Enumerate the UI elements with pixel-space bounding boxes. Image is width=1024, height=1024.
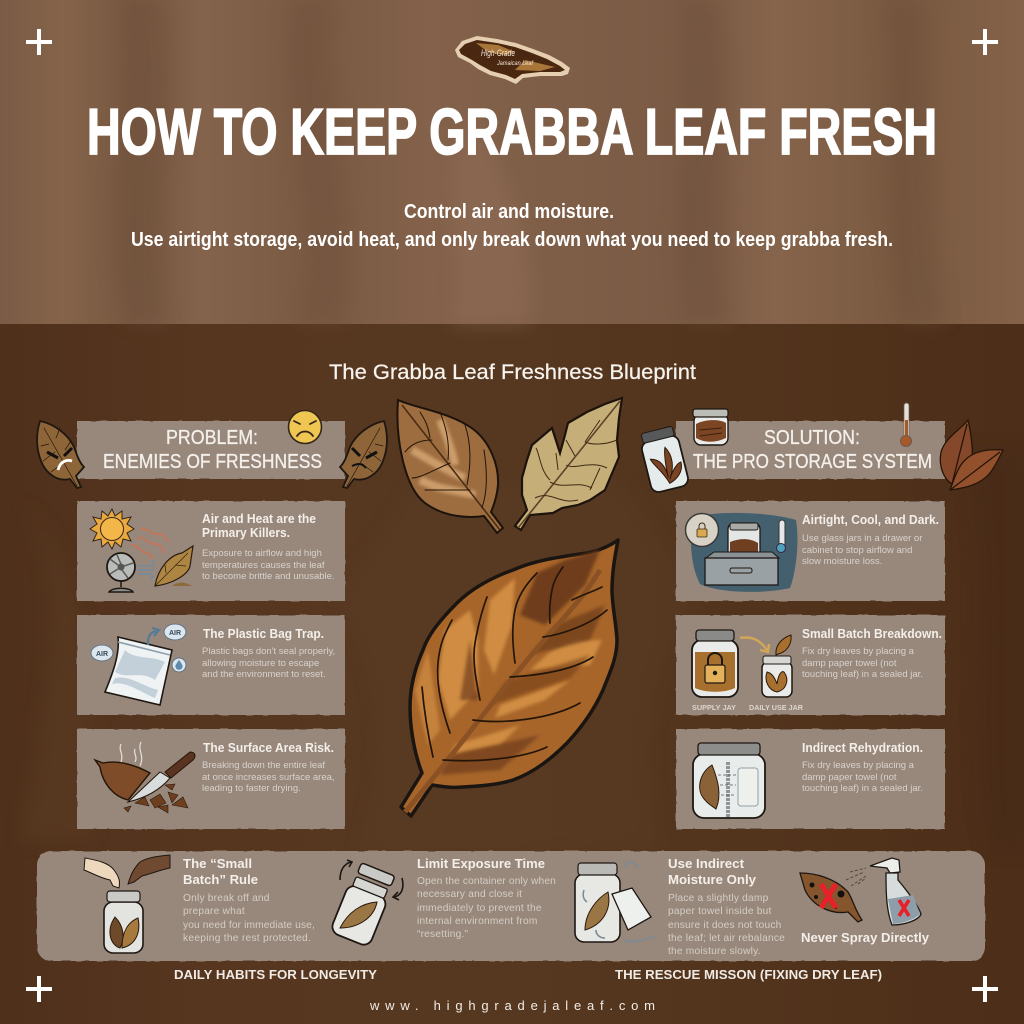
caption: daily habits: DAILY HABITS FOR LONGEVITY xyxy=(174,967,377,982)
text: small batch: Fix dry leaves by placing a xyxy=(802,646,915,657)
text: limit exposure: “resetting.” xyxy=(417,929,468,940)
icon: escape arrow xyxy=(148,628,159,645)
icon: cold thermometer xyxy=(776,520,786,552)
icon: spray bottle xyxy=(870,858,921,925)
icon: rehydration jar xyxy=(693,743,765,818)
text: small batch rule: keeping the rest protected. xyxy=(183,933,311,944)
jar labels: SUPPLY JAY xyxy=(692,703,736,712)
problem heading text: ENEMIES OF FRESHNESS xyxy=(103,451,322,473)
icon: knife xyxy=(128,752,195,802)
icon: air cloud right: AIR xyxy=(169,630,181,637)
text: limit exposure: Open the container only when xyxy=(417,876,556,887)
text: small batch rule: Only break off and xyxy=(183,893,270,904)
icon: sad face xyxy=(288,410,322,444)
subtitle: Control air and moisture. xyxy=(404,201,614,223)
icon: fan xyxy=(107,553,135,592)
text: never spray directly: Never Spray Directly xyxy=(801,930,930,945)
big leaf midrib xyxy=(405,570,600,812)
icon: spray mist xyxy=(846,868,866,886)
text: air and heat: Air and Heat are the xyxy=(202,511,316,526)
text: small batch rule: The “Small xyxy=(183,856,252,871)
icon: cut leaf xyxy=(95,760,150,800)
icon: angry leaf right xyxy=(340,421,387,488)
logo: High-Grade Jamaican Leaf: Jamaican Leaf xyxy=(496,61,534,67)
text: airtight cool dark: Use glass jars in a drawer or xyxy=(802,533,922,544)
text: indirect moisture: ensure it does not touch xyxy=(668,920,782,931)
icon: opening jar xyxy=(330,860,403,947)
text: indirect moisture xyxy=(668,856,785,957)
text: small batch rule: you need for immediate use, xyxy=(183,920,315,931)
text: indirect rehydration: Indirect Rehydration. xyxy=(802,740,923,755)
jar labels xyxy=(692,703,803,712)
text: indirect moisture: Use Indirect xyxy=(668,856,745,871)
panel: surface area xyxy=(95,740,335,813)
text: air and heat xyxy=(202,511,335,582)
icon: heat waves xyxy=(131,529,169,559)
icon: two brown leaves xyxy=(940,420,1003,490)
solution heading text: SOLUTION: xyxy=(764,427,860,449)
icon: air cloud left xyxy=(91,645,113,661)
icon: air cloud right xyxy=(164,624,186,640)
text: indirect rehydration: damp paper towel (not xyxy=(802,772,897,783)
heading: blueprint: The Grabba Leaf Freshness Blueprint xyxy=(329,361,696,384)
logo: High-Grade Jamaican Leaf: High-Grade xyxy=(481,48,515,58)
icon: jar with towel xyxy=(575,862,655,942)
icon: top right dry leaf xyxy=(515,398,622,530)
text: indirect moisture: Place a slightly damp xyxy=(668,893,769,904)
icon: supply jar with lock xyxy=(692,630,738,697)
panel: plastic bag xyxy=(91,624,335,705)
solution heading text: THE PRO STORAGE SYSTEM xyxy=(693,451,932,473)
text: air and heat: temperatures causes the leaf xyxy=(202,560,325,571)
icon: airtight badge xyxy=(686,514,718,546)
text: small batch: damp paper towel (not xyxy=(802,658,897,669)
big leaf highlights xyxy=(415,578,602,755)
problem heading text: PROBLEM: xyxy=(166,427,258,449)
icon: leaf crumbs xyxy=(124,784,188,813)
text: limit exposure: internal environment from xyxy=(417,916,538,927)
text: indirect moisture: the moisture slowly. xyxy=(668,946,761,957)
icon: angry leaf left xyxy=(37,421,84,488)
icon: jar with leaves xyxy=(104,891,143,953)
text: surface area xyxy=(202,740,335,794)
text: small batch: touching leaf) in a sealed jar. xyxy=(802,669,923,680)
text: small batch xyxy=(802,626,942,680)
text: surface area: The Surface Area Risk. xyxy=(203,740,334,755)
icon: tilted jar with leaves xyxy=(638,425,690,494)
panel backgrounds xyxy=(37,421,985,961)
text: plastic bag: allowing moisture to escape xyxy=(202,658,319,669)
icon: moisture drop xyxy=(172,658,186,672)
text: plastic bag: The Plastic Bag Trap. xyxy=(203,626,324,641)
text: limit exposure: Limit Exposure Time xyxy=(417,856,545,871)
footer: website: www. highgradejaleaf.com xyxy=(369,998,655,1013)
panel: indirect rehydration xyxy=(693,740,923,818)
icon: daily use jar xyxy=(762,635,792,697)
background: upper banner xyxy=(0,0,1024,324)
text: limit exposure xyxy=(417,856,556,940)
text: plastic bag: Plastic bags don't seal properly, xyxy=(202,646,335,657)
icon: small jar with leaves xyxy=(693,409,728,445)
subtitle: Use airtight storage, avoid heat, and only break down what you need to keep grabba fresh. xyxy=(131,229,893,251)
panel: air and heat xyxy=(90,509,335,592)
icon: large central leaf xyxy=(401,540,618,816)
text: airtight cool dark: Airtight, Cool, and Dark. xyxy=(802,512,939,527)
icon: thermometer xyxy=(900,403,912,446)
text: small batch: Small Batch Breakdown. xyxy=(802,626,942,641)
text: airtight cool dark: slow moisture loss. xyxy=(802,556,882,567)
panel: problem header xyxy=(37,410,387,488)
text: plastic bag: and the environment to reset. xyxy=(202,669,326,680)
text: air and heat: to become brittle and unusable. xyxy=(202,571,335,582)
text: indirect rehydration: Fix dry leaves by placing a xyxy=(802,760,915,771)
panel: small batch breakdown xyxy=(692,626,942,712)
icon: plastic bag xyxy=(105,637,172,705)
icon: top left leaf xyxy=(397,400,503,533)
panel: airtight cool dark xyxy=(686,512,939,592)
icon: hands over jar xyxy=(84,855,170,888)
text: surface area: at once increases surface area, xyxy=(202,772,335,783)
jar labels: DAILY USE JAR xyxy=(749,703,803,712)
icon: air cloud left: AIR xyxy=(96,651,108,658)
text: indirect rehydration: touching leaf) in a sealed jar. xyxy=(802,783,923,794)
text: limit exposure: immediately to prevent the xyxy=(417,903,542,914)
text: plastic bag xyxy=(202,626,335,680)
icon: spotted leaf with red x xyxy=(800,873,862,922)
text: indirect moisture: the leaf; let air rebalance xyxy=(668,933,785,944)
text: small batch rule: prepare what xyxy=(183,906,245,917)
text: small batch rule xyxy=(183,856,315,944)
background: lower section xyxy=(0,324,1024,1024)
text: small batch rule: Batch” Rule xyxy=(183,872,258,887)
text: indirect moisture: Moisture Only xyxy=(668,872,757,887)
text: limit exposure: necessary and close it xyxy=(417,889,522,900)
problem heading text xyxy=(103,427,322,473)
text: air and heat: Exposure to airflow and high xyxy=(202,548,322,559)
icon: wind lines xyxy=(137,561,154,579)
icon: gold arrow xyxy=(740,638,769,652)
big leaf veins xyxy=(422,567,607,761)
icon: steam xyxy=(120,742,142,766)
text: indirect rehydration xyxy=(802,740,923,794)
panel: solution header xyxy=(638,403,1003,494)
logo: High-Grade Jamaican Leaf xyxy=(455,36,570,84)
big leaf shadows xyxy=(440,550,605,775)
text: air and heat: Primary Killers. xyxy=(202,525,290,540)
text: surface area: Breaking down the entire leaf xyxy=(202,760,325,771)
text: airtight cool dark xyxy=(802,512,939,567)
text: indirect moisture: paper towel inside but xyxy=(668,906,772,917)
text: surface area: leading to faster drying. xyxy=(202,783,301,794)
icon: sun xyxy=(90,509,134,549)
icon: drawer scene xyxy=(691,513,797,592)
text: airtight cool dark: cabinet to stop airflow and xyxy=(802,545,912,556)
solution heading text xyxy=(693,427,932,473)
caption: rescue mission: THE RESCUE MISSON (FIXING DRY LEAF) xyxy=(615,967,882,982)
icon: dry leaf crumbling xyxy=(155,546,193,586)
subtitle xyxy=(131,201,893,251)
panel: bottom habits and rescue xyxy=(84,855,930,957)
